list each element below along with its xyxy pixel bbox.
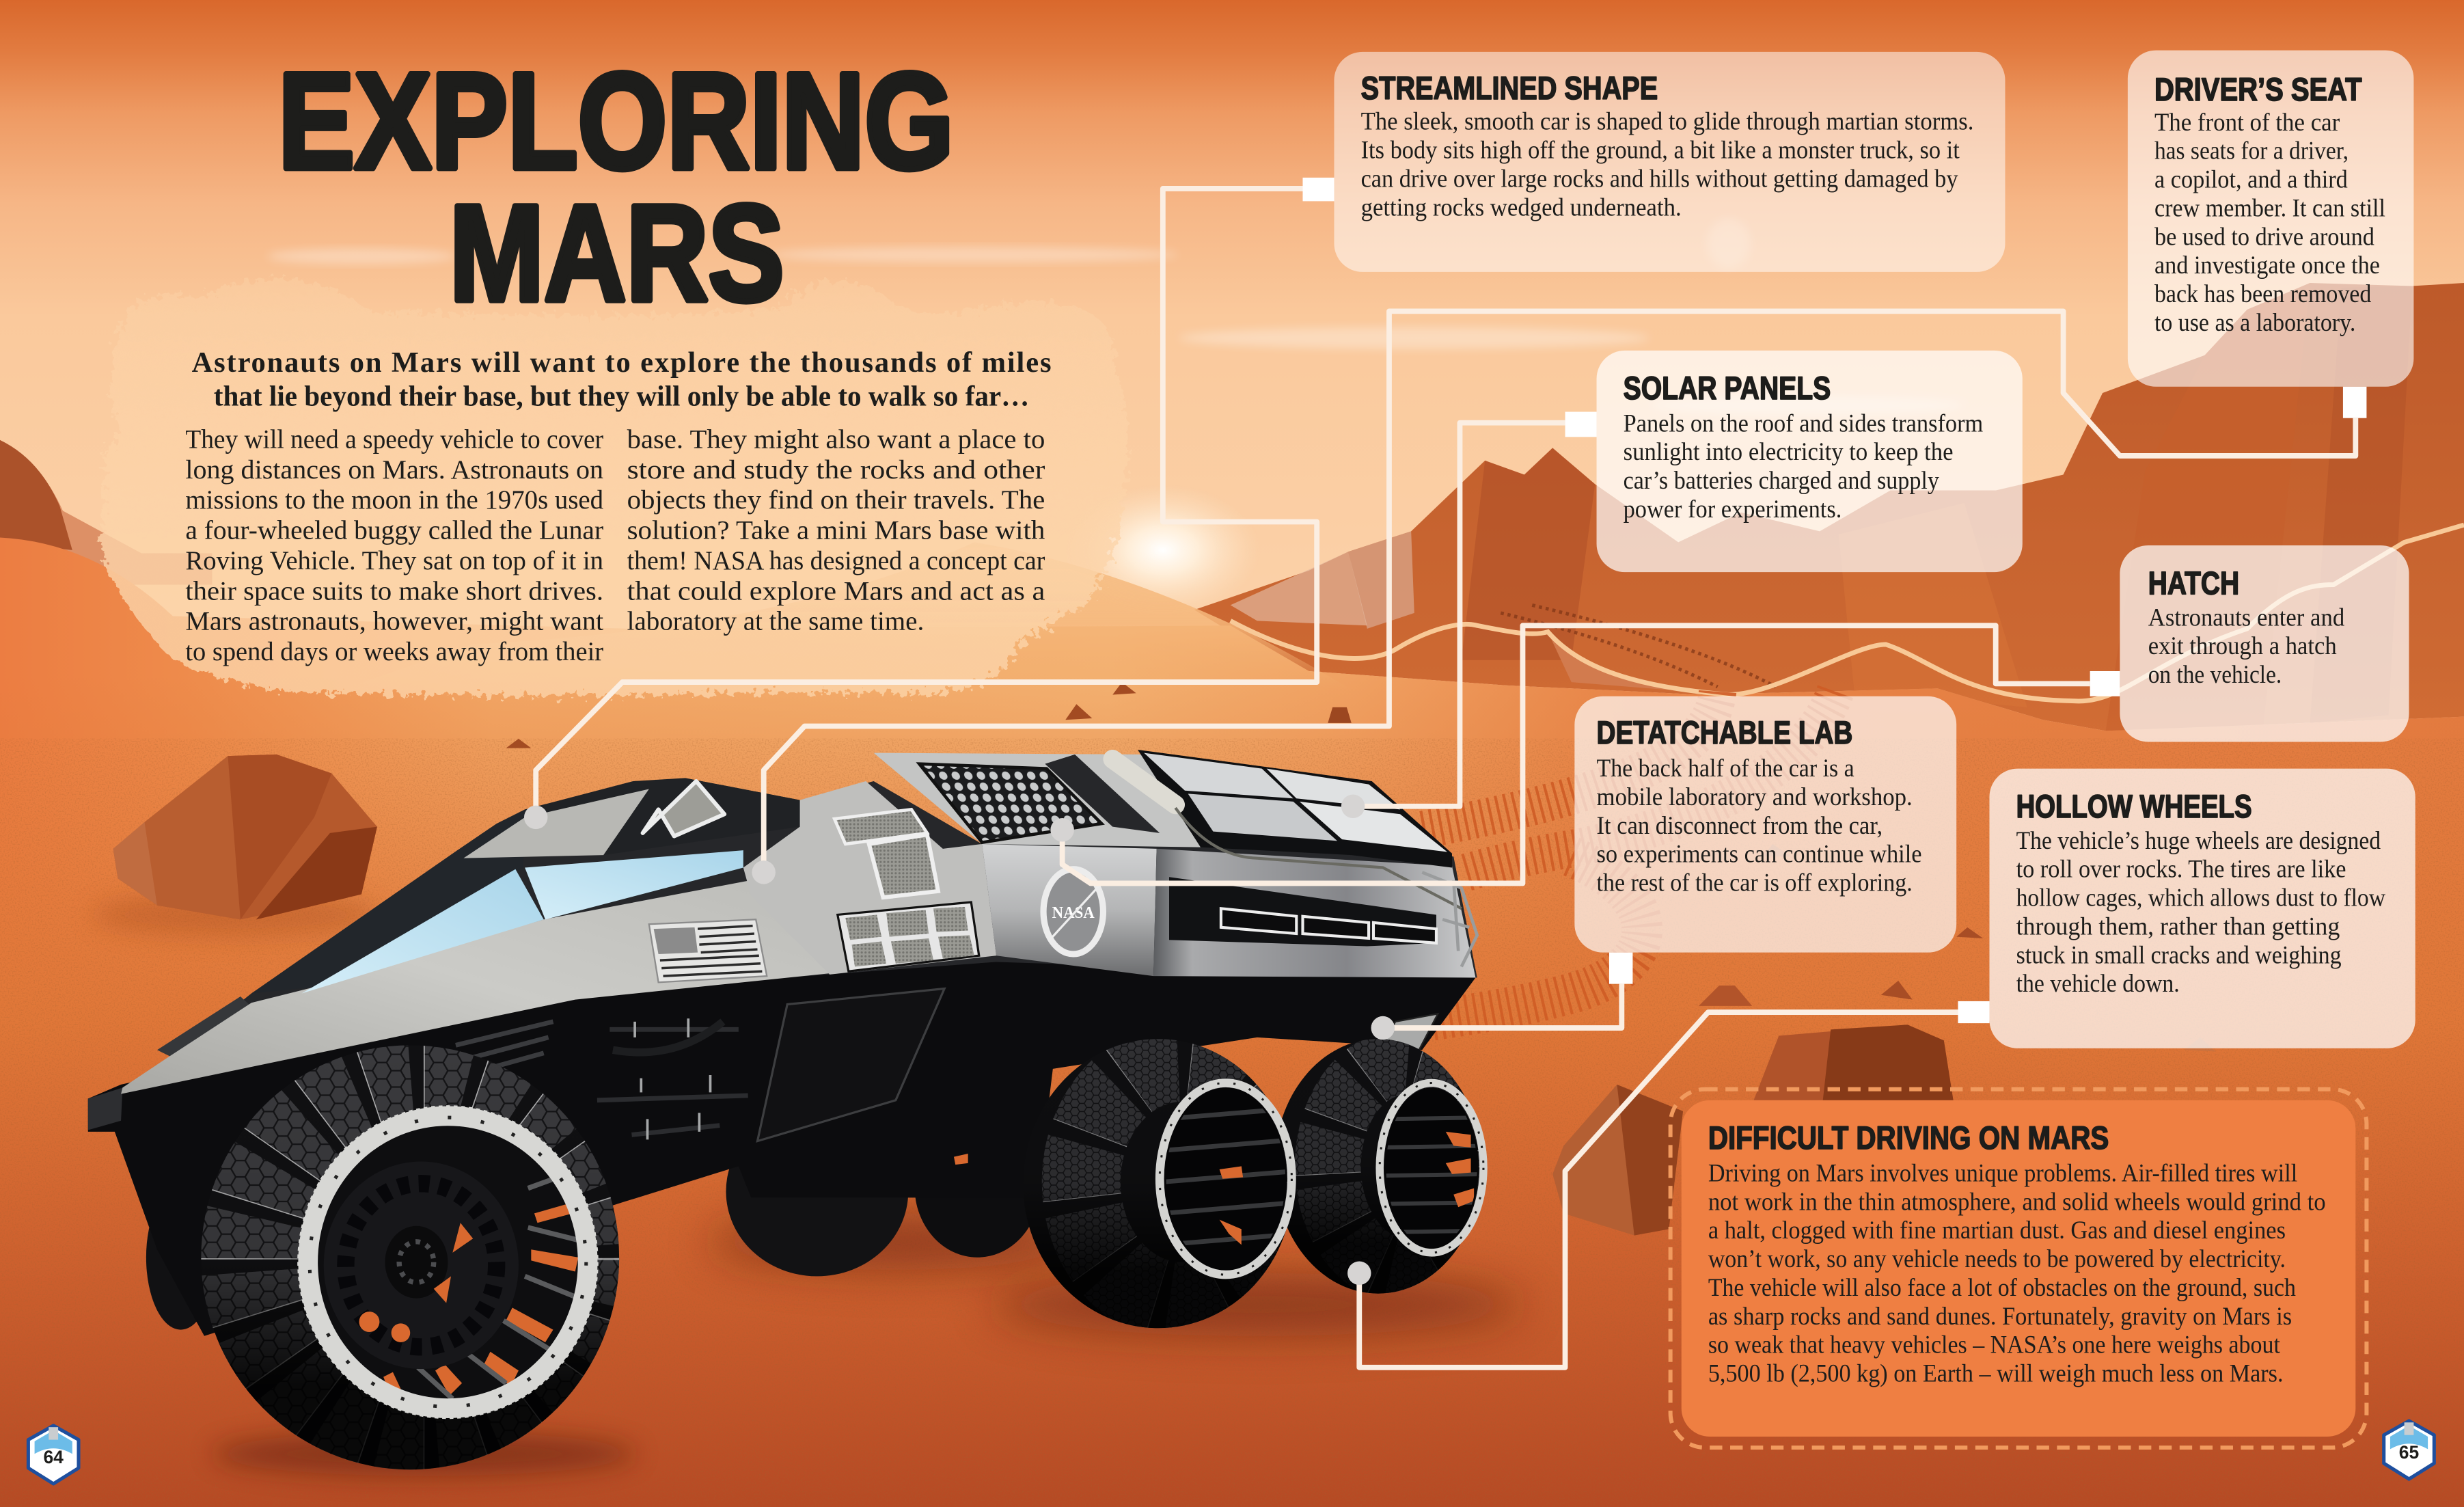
- panel: driver's seat: and investigate once the: [2154, 251, 2380, 279]
- dark windscreen pillar: [251, 809, 525, 993]
- American flag plate: [649, 919, 767, 982]
- perforated plate: [919, 764, 1101, 843]
- body text: column one: long distances on Mars. Astronauts on: [185, 455, 603, 485]
- panel: detachable lab: The back half of the car is a: [1597, 754, 1854, 782]
- panel: driver's seat: a copilot, and a third: [2154, 165, 2348, 193]
- panel: solar panels: car’s batteries charged and supply: [1624, 466, 1939, 494]
- title: EXPLORING: [278, 45, 954, 198]
- panel: hollow wheels: to roll over rocks. The tires are like: [2016, 855, 2346, 883]
- panel: difficult driving on Mars: a halt, clogged with fine martian dust. Gas and diesel engines: [1708, 1216, 2286, 1244]
- panel: driver's seat: DRIVER’S SEAT: [2154, 71, 2362, 107]
- front hatch frame: [643, 781, 724, 836]
- panel: hollow wheels: The vehicle’s huge wheels are designed: [2016, 826, 2381, 854]
- panel: hatch: Astronauts enter and: [2148, 603, 2344, 631]
- silver roof wing: [463, 789, 649, 858]
- suspension gap: [954, 1154, 968, 1165]
- body text: column one: They will need a speedy vehicle to cover: [185, 424, 603, 454]
- lower black body: [88, 943, 1475, 1336]
- panel: streamlined shape: The sleek, smooth car is shaped to glide through martian storms.: [1361, 107, 1973, 135]
- solar panels: [1138, 750, 1452, 867]
- connector: solar panels: [1341, 423, 1565, 818]
- Mars concept vehicle: [88, 750, 1485, 1469]
- panel: streamlined shape: [1302, 52, 2005, 272]
- panel: difficult driving on Mars: won’t work, so any vehicle needs to be powered by electricity.: [1708, 1245, 2286, 1273]
- wheel: large front: [201, 1045, 619, 1469]
- background: tyre tracks in the sand: [1422, 692, 1835, 1022]
- body text: column two: them! NASA has designed a concept car: [627, 546, 1045, 575]
- rear left wheels: [146, 1107, 1040, 1330]
- intro text: [192, 347, 1052, 412]
- background: central dune: [314, 542, 1367, 699]
- dark strip: [1045, 755, 1160, 833]
- body text: column one: Roving Vehicle. They sat on top of it in: [185, 546, 603, 575]
- panel: streamlined shape: getting rocks wedged underneath.: [1361, 193, 1682, 221]
- background: mountain range: [1194, 283, 2464, 731]
- body text: column one: missions to the moon in the 1970s used: [185, 485, 604, 515]
- cabin backing: [157, 778, 1477, 1069]
- connector: hatch: [1050, 625, 2090, 883]
- nose block: [88, 1087, 122, 1130]
- panel: difficult driving on Mars: Driving on Mars involves unique problems. Air-filled tires will: [1708, 1158, 2297, 1186]
- panel: hollow wheels: the vehicle down.: [2016, 969, 2180, 997]
- side air vent near front wheel: [456, 1022, 553, 1069]
- panel: difficult driving on Mars: 5,500 lb (2,500 kg) on Earth – will weigh much less on Mars.: [1708, 1359, 2284, 1387]
- panel: driver's seat: [2128, 51, 2413, 418]
- roof dark cover: [525, 778, 800, 855]
- body text: column one: to spend days or weeks away from their: [185, 637, 603, 666]
- panel: streamlined shape: Its body sits high off the ground, a bit like a monster truck, so it: [1361, 136, 1960, 164]
- body text: column one: [185, 424, 604, 666]
- car shadow on the ground: [212, 1213, 1524, 1476]
- panel: hollow wheels: through them, rather than getting: [2016, 912, 2340, 940]
- body text: column two: [627, 424, 1045, 636]
- panel: driver's seat: back has been removed: [2154, 280, 2371, 308]
- intro text: Astronauts on Mars will want to explore the thousands of miles: [192, 347, 1052, 379]
- panel: difficult driving on Mars: DIFFICULT DRIVING ON MARS: [1708, 1119, 2109, 1156]
- panel: solar panels: [1565, 351, 2023, 572]
- connector: streamlined shape: [524, 189, 1317, 829]
- background: sand fade into lower ground: [0, 676, 2464, 1022]
- background: dust cloud behind intro: [101, 279, 1127, 696]
- body text: column two: store and study the rocks and other: [627, 455, 1045, 485]
- rear fittings: [1422, 872, 1477, 966]
- rock: large left boulder: [91, 755, 381, 937]
- background: sand with horizontal tone: [0, 538, 2464, 1037]
- body text: column two: laboratory at the same time.: [627, 607, 924, 636]
- NASA badge: NASA: [1052, 904, 1095, 922]
- connector: hollow wheels: [1347, 1012, 1958, 1368]
- panel: detachable lab: DETATCHABLE LAB: [1597, 714, 1852, 750]
- panel: hollow wheels: [1958, 769, 2415, 1048]
- panel: difficult driving on Mars: The vehicle will also face a lot of obstacles on the ground, such: [1708, 1273, 2296, 1301]
- rear vent recess: [1169, 877, 1436, 946]
- body text: column two: that could explore Mars and act as a: [627, 576, 1045, 606]
- panel: hollow wheels: hollow cages, which allows dust to flow: [2016, 884, 2385, 912]
- panel: detachable lab: so experiments can continue while: [1597, 840, 1922, 868]
- rear vent windows: [1221, 908, 1436, 943]
- panel: driver's seat: to use as a laboratory.: [2154, 308, 2355, 336]
- panel: solar panels: power for experiments.: [1624, 495, 1842, 523]
- small hatch windows: [834, 809, 938, 897]
- panel: hatch: exit through a hatch: [2148, 632, 2337, 660]
- core sample tools: [597, 1018, 748, 1139]
- panel: detachable lab: [1574, 696, 1956, 984]
- silver hood and side: [121, 874, 849, 1094]
- panel: streamlined shape: STREAMLINED SHAPE: [1361, 70, 1658, 106]
- rear step plate: [1383, 1014, 1438, 1050]
- background: lower ground: [0, 1020, 2464, 1507]
- background: sand grain: [0, 739, 2464, 1507]
- panel: solar panels: SOLAR PANELS: [1624, 370, 1831, 406]
- page number badge: 65: 65: [2399, 1442, 2419, 1463]
- white cylinder: [1112, 759, 1175, 804]
- page number badge: 64: [28, 1426, 79, 1484]
- body text: column two: objects they find on their travels. The: [627, 485, 1045, 515]
- background: wispy clouds: [267, 219, 1965, 415]
- panel: difficult driving on Mars: not work in the thin atmosphere, and solid wheels would grind to: [1708, 1187, 2326, 1215]
- page number badge: 65: [2384, 1421, 2434, 1479]
- six panel grille: [838, 902, 979, 971]
- wheel: near right: [1023, 1039, 1296, 1328]
- body text: column two: solution? Take a mini Mars base with: [627, 516, 1045, 545]
- panel: driver's seat: has seats for a driver,: [2154, 137, 2349, 165]
- panel: hatch: HATCH: [2148, 565, 2239, 601]
- panel: streamlined shape: can drive over large rocks and hills without getting damaged by: [1361, 164, 1958, 192]
- panel: driver's seat: The front of the car: [2154, 108, 2340, 136]
- panel: solar panels: Panels on the roof and sides transform: [1624, 409, 1984, 437]
- panel: driver's seat: be used to drive around: [2154, 222, 2374, 250]
- rocks: small scattered rocks: [506, 682, 2216, 1052]
- panel: solar panels: sunlight into electricity to keep the: [1624, 437, 1954, 465]
- panel: difficult driving on Mars: so weak that heavy vehicles – NASA’s one here weighs about: [1708, 1331, 2280, 1359]
- rock: boulder behind callout: [1754, 1024, 1954, 1100]
- body text: column two: base. They might also want a place to: [627, 424, 1045, 454]
- connector: driver's seat: [752, 311, 2355, 884]
- page number badge: 64: 64: [43, 1447, 64, 1467]
- background: martian sky: [0, 0, 2464, 755]
- rock: boulder beside callout: [1552, 1085, 1683, 1236]
- body text: column one: a four-wheeled buggy called the Lunar: [185, 516, 603, 545]
- panel: difficult driving on Mars: as sharp rocks and sand dunes. Fortunately, gravity on Mars is: [1708, 1302, 2292, 1330]
- title: MARS: [450, 177, 784, 329]
- raised module chrome face: [982, 844, 1157, 976]
- background: far left hill: [0, 440, 212, 585]
- panel: hollow wheels: stuck in small cracks and weighing: [2016, 940, 2342, 968]
- rear chrome side panel: [1153, 849, 1475, 977]
- background: ridge in front of mountains: [1231, 525, 2464, 701]
- body text: column one: Mars astronauts, however, might want: [185, 607, 603, 636]
- windscreen: [302, 869, 544, 993]
- connector: detachable lab: [1371, 984, 1621, 1040]
- NASA badge: [1043, 869, 1103, 954]
- panel: detachable lab: It can disconnect from the car,: [1597, 811, 1883, 839]
- panel: difficult driving on Mars: [1671, 1089, 2366, 1448]
- panel: hatch: [2090, 545, 2409, 742]
- raised module slope: [874, 753, 1201, 847]
- panel: detachable lab: the rest of the car is off exploring.: [1597, 868, 1913, 896]
- panel: hatch: on the vehicle.: [2148, 660, 2282, 688]
- intro text: that lie beyond their base, but they will only be able to walk so far…: [214, 380, 1029, 412]
- background: sun glow: [1065, 484, 1260, 616]
- side cable: [1175, 808, 1462, 908]
- panel: driver's seat: crew member. It can still: [2154, 193, 2385, 221]
- body text: column one: their space suits to make short drives.: [185, 576, 603, 606]
- side window: [525, 850, 743, 919]
- mid upper silver panel: [743, 781, 996, 975]
- hood ridge: [157, 996, 259, 1056]
- wheel: far right: [1274, 1039, 1485, 1294]
- title: [278, 45, 954, 329]
- panel: hollow wheels: HOLLOW WHEELS: [2016, 788, 2252, 824]
- side door panel: [757, 989, 944, 1141]
- panel: detachable lab: mobile laboratory and workshop.: [1597, 783, 1913, 811]
